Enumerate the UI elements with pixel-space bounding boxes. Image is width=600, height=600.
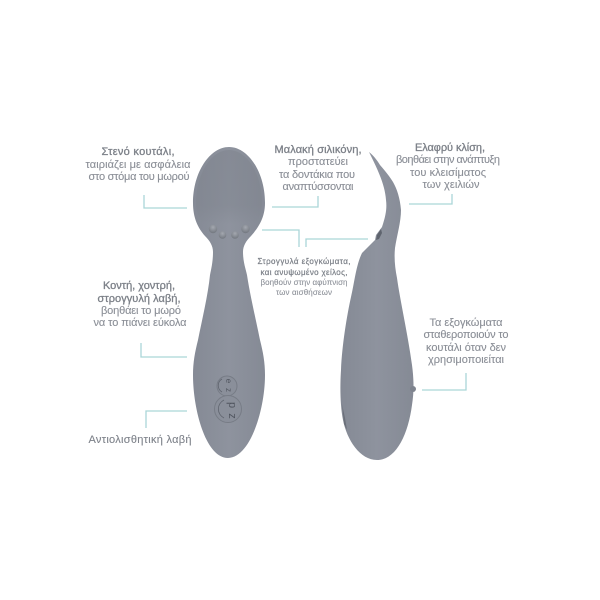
callout: round nubs and raised lip: και ανυψωμένο χείλος, [260, 268, 348, 277]
callout: anti-slip handle [88, 411, 192, 446]
callout: round nubs and raised lip: των αισθήσεων [276, 288, 332, 297]
spoon profile [340, 152, 414, 460]
callout: stabilising nubs [422, 317, 508, 390]
callout: stabilising nubs: σταθεροποιούν το [424, 329, 508, 341]
callout: soft silicone: τα δοντάκια που [279, 169, 355, 181]
ezpz logo [214, 376, 242, 422]
callout: stabilising nubs: κουτάλι όταν δεν [426, 342, 506, 354]
callout: slight tilt: βοηθάει στην ανάπτυξη [396, 154, 500, 166]
ezpz logo: p [226, 402, 238, 408]
callout: short thick handle [94, 280, 187, 357]
callout: stabilising nubs: Τα εξογκώματα [430, 317, 503, 329]
callout: slight tilt: του κλεισίματος [410, 167, 486, 179]
callout: short thick handle: Κοντή, χοντρή, [103, 280, 175, 292]
ezpz logo: e [224, 379, 233, 384]
callout: anti-slip handle: Αντιολισθητική λαβή [88, 434, 192, 446]
callout: slight tilt [396, 142, 500, 204]
ezpz logo: z [224, 388, 233, 392]
callout: round nubs and raised lip: βοηθούν στην αφύπνιση [260, 278, 348, 287]
callout: soft silicone: αναπτύσσονται [282, 181, 354, 193]
left spoon: front view [193, 147, 265, 458]
ezpz logo: z [226, 413, 238, 419]
callout: narrow spoon: ταιριάζει με ασφάλεια [86, 159, 191, 171]
side stabilising bump [410, 386, 416, 392]
bowl nubs [209, 225, 250, 239]
callout: soft silicone: προστατεύει [288, 156, 349, 168]
callout: slight tilt: Ελαφρύ κλίση, [415, 142, 485, 154]
callout: short thick handle: βοηθάει το μωρό [101, 305, 181, 317]
callout: short thick handle: να το πιάνει εύκολα [94, 317, 187, 329]
callout: narrow spoon: Στενό κουτάλι, [102, 146, 174, 158]
callout: stabilising nubs: χρησιμοποιείται [428, 354, 505, 366]
spoon body with bowl and handle [193, 147, 265, 458]
callout: soft silicone [272, 144, 362, 207]
callout: round nubs and raised lip: Στρογγυλά εξογκώματα, [258, 257, 350, 266]
lip notch [376, 229, 382, 240]
back nub [342, 404, 347, 430]
bowl inner hollow [196, 150, 262, 224]
callout: narrow spoon: στο στόμα του μωρού [88, 171, 190, 183]
callout: soft silicone: Μαλακή σιλικόνη, [274, 144, 362, 156]
right spoon: side view [340, 152, 416, 460]
callout: slight tilt: των χειλιών [422, 179, 480, 191]
callout: short thick handle: στρογγυλή λαβή, [98, 293, 180, 305]
callout: narrow spoon [86, 146, 191, 208]
callout: round nubs and raised lip [258, 230, 368, 297]
